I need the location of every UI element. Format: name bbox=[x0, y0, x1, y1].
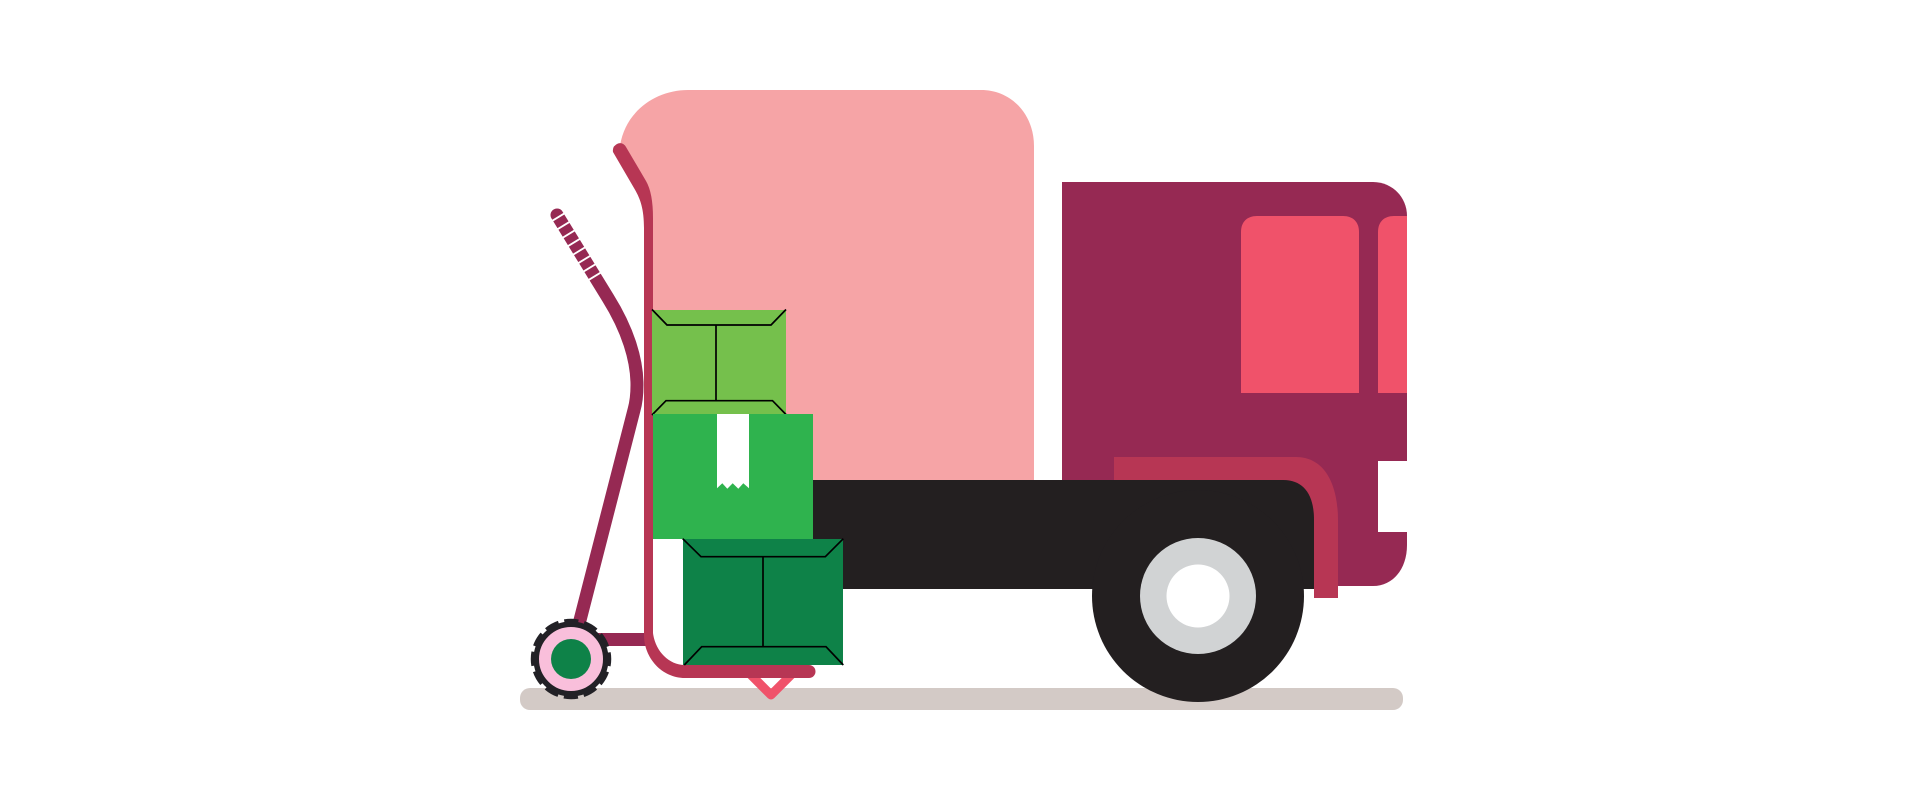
handle grip stripes bbox=[549, 212, 603, 282]
cab body bbox=[1062, 182, 1407, 586]
parcel lines bbox=[683, 539, 843, 665]
wheel arch bbox=[1114, 457, 1338, 598]
trolley wheel bbox=[533, 621, 609, 697]
cab window small bbox=[1378, 216, 1407, 393]
cab headlight bbox=[1378, 461, 1407, 532]
parcel body bbox=[652, 310, 786, 415]
box: mid green parcel bbox=[653, 414, 813, 539]
box: dark green parcel bbox=[683, 539, 843, 665]
trolley brace bbox=[746, 670, 796, 695]
wheel hub bbox=[551, 639, 591, 679]
parcel body bbox=[683, 539, 843, 665]
truck chassis bbox=[813, 480, 1314, 589]
wheel tyre bbox=[536, 624, 606, 694]
handle bar bbox=[557, 215, 637, 628]
trolley rear handle bbox=[549, 212, 637, 628]
wheel tread bbox=[533, 621, 609, 697]
truck cab bbox=[1062, 182, 1407, 586]
parcel body bbox=[653, 414, 813, 539]
trolley frame bbox=[613, 143, 816, 678]
truck cargo box bbox=[620, 90, 1034, 481]
box: light green parcel bbox=[652, 310, 786, 415]
parcel lines bbox=[652, 310, 786, 415]
rim bbox=[1140, 538, 1256, 654]
parcel tape bbox=[717, 414, 749, 489]
trolley axle bar bbox=[585, 633, 650, 646]
ground strip bbox=[520, 688, 1403, 710]
tyre bbox=[1092, 490, 1304, 702]
hub bbox=[1166, 564, 1230, 628]
cab window large bbox=[1241, 216, 1359, 393]
truck wheel bbox=[1092, 490, 1304, 702]
